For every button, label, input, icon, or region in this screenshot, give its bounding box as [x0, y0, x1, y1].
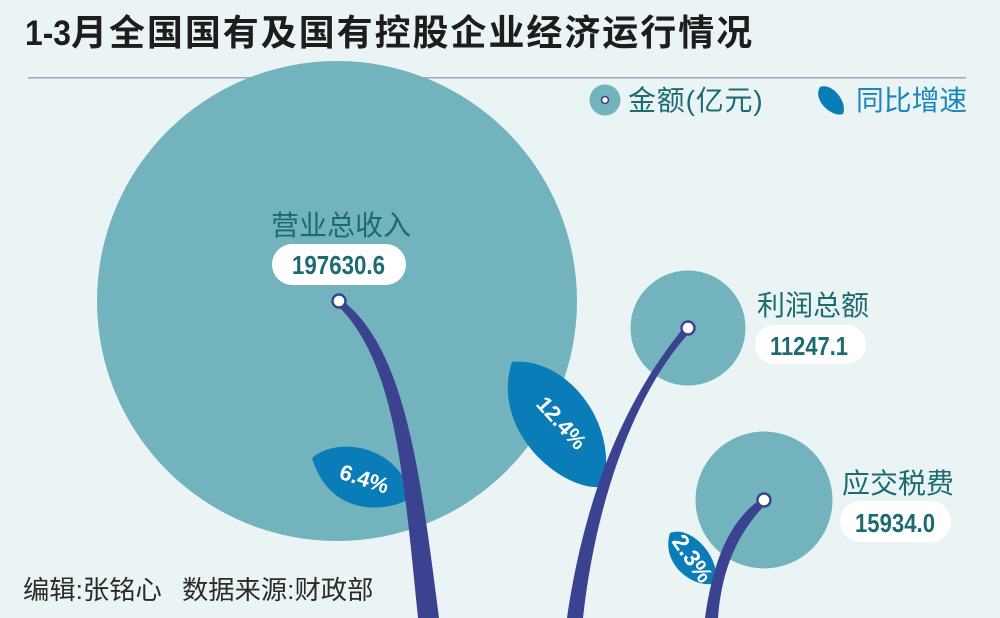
label: taxes: 15934.0 [855, 508, 935, 538]
leaf: profit growth: 12.4% [531, 391, 592, 455]
leaf: revenue growth: 6.4% [337, 459, 392, 499]
leaf: profit growth [508, 362, 606, 487]
legend: growth: 同比增速 [856, 85, 967, 116]
label: profit: 利润总额 [757, 290, 869, 321]
label: revenue [271, 210, 411, 285]
label: profit: 11247.1 [770, 331, 848, 361]
title: 1-3 [25, 14, 71, 53]
leaf: revenue growth [312, 447, 407, 508]
title: 月全国国有及国有控股企业经济运行情况 [71, 12, 754, 53]
stem: taxes [705, 494, 770, 618]
credits [23, 575, 373, 605]
credits: 编辑:张铭心 [23, 575, 162, 605]
leaf: taxes growth: 2.3% [667, 529, 718, 587]
bubble: revenue [97, 61, 577, 541]
label: taxes [840, 468, 954, 542]
bubble: taxes [696, 432, 832, 568]
stem: profit [567, 322, 694, 618]
stem: revenue [332, 294, 439, 618]
legend: amount: 金额(亿元) [628, 85, 763, 116]
label: profit [755, 290, 869, 364]
credits: 数据来源:财政部 [182, 575, 373, 605]
label: revenue: 197630.6 [292, 250, 385, 280]
label: taxes: 应交税费 [842, 468, 954, 499]
label: revenue: 营业总收入 [271, 210, 411, 241]
bubble: profit [630, 270, 746, 386]
